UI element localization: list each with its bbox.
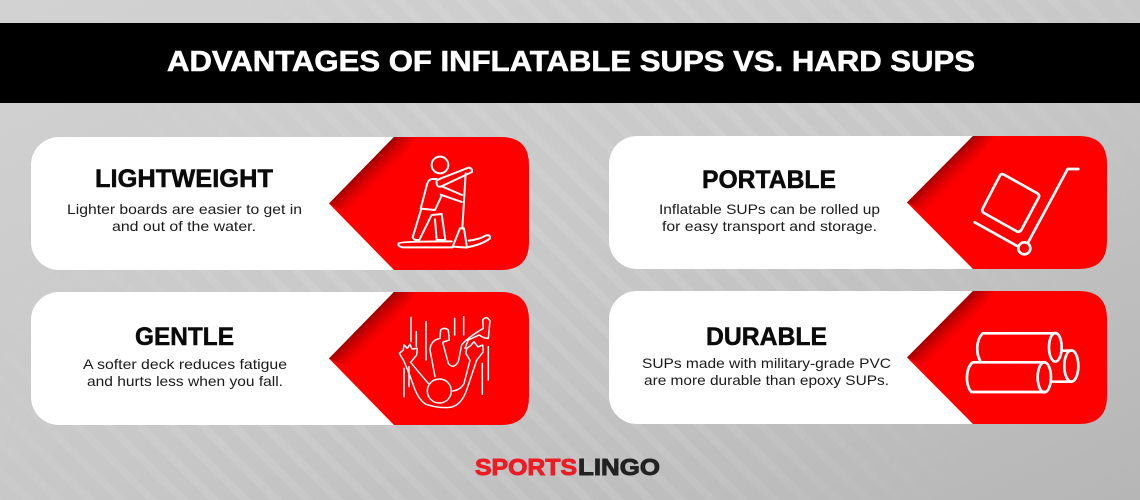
panel: gentle <box>31 292 529 425</box>
text: portable description: Inflatable SUPs can be rolled up <box>659 201 880 217</box>
panel: durable <box>609 291 1107 424</box>
text: lightweight description: and out of the water. <box>112 218 256 234</box>
logo: SportsLingo: LINGO <box>578 454 660 480</box>
text: durable description: SUPs made with military-grade PVC <box>642 355 891 371</box>
icon: person falling <box>399 317 490 408</box>
icon: stacked pipes <box>967 333 1078 392</box>
title banner <box>0 23 1140 103</box>
title: ADVANTAGES OF INFLATABLE SUPS VS. HARD SUPS <box>167 46 975 78</box>
panel: lightweight <box>31 137 529 270</box>
text: durable description: are more durable than epoxy SUPs. <box>644 372 889 388</box>
text: durable description <box>642 355 891 388</box>
heading: portable: PORTABLE <box>702 166 836 194</box>
panel: portable <box>609 136 1107 269</box>
text: portable description <box>659 201 880 234</box>
text: gentle description: A softer deck reduces fatigue <box>83 356 287 372</box>
text: lightweight description: Lighter boards are easier to get in <box>67 201 302 217</box>
heading: gentle: GENTLE <box>135 323 234 351</box>
icon: paddleboarder <box>398 157 490 248</box>
heading: lightweight: LIGHTWEIGHT <box>95 165 273 193</box>
text: lightweight description <box>67 201 302 234</box>
heading: durable: DURABLE <box>706 323 827 351</box>
text: portable description: for easy transport and storage. <box>662 218 877 234</box>
icon: hand truck with box <box>975 169 1078 254</box>
logo: SportsLingo <box>475 454 660 480</box>
logo: SportsLingo: SPORTS <box>475 454 577 480</box>
text: gentle description: and hurts less when you fall. <box>87 373 283 389</box>
text: gentle description <box>83 356 287 389</box>
